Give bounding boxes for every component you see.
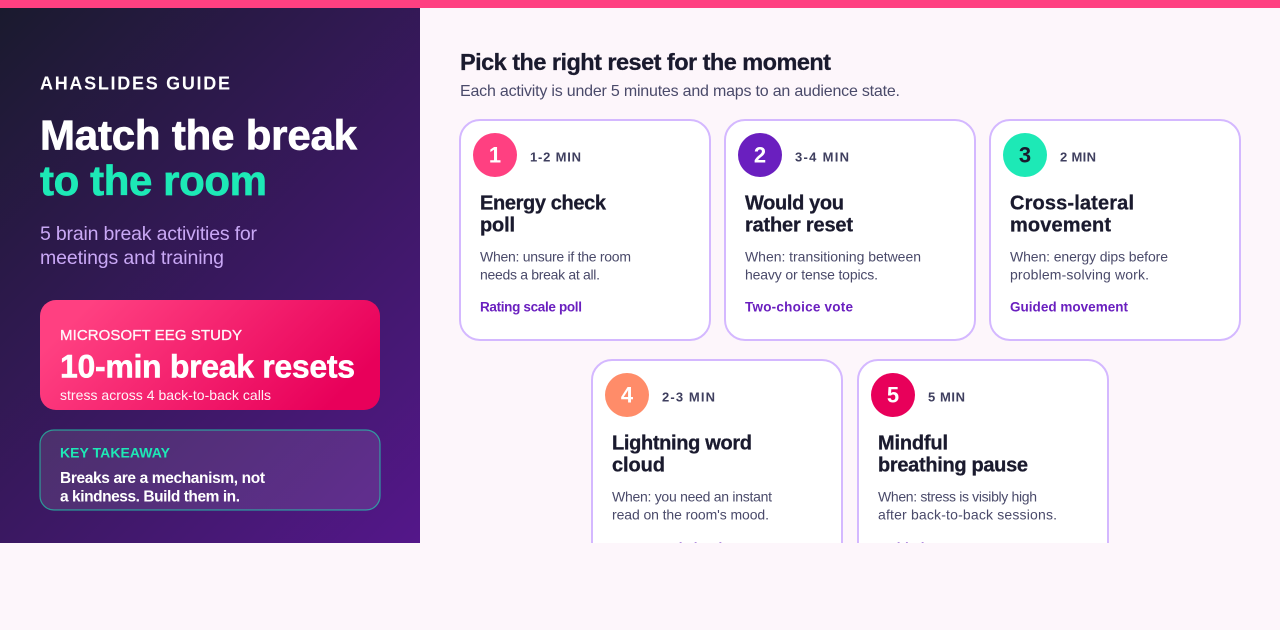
card 2: would you rather reset: 3-4 MIN <box>795 150 849 165</box>
callout: Microsoft EEG study: 10-min break resets <box>60 348 355 384</box>
card 4: lightning word cloud: Lightning word <box>612 432 752 454</box>
callout: Microsoft EEG study <box>40 300 380 410</box>
card 3: cross-lateral movement: Guided movement <box>1010 300 1128 315</box>
card 1: energy check poll: When: unsure if the room <box>480 249 631 265</box>
card 3: cross-lateral movement: problem-solving work. <box>1010 266 1149 282</box>
card 3: cross-lateral movement <box>990 120 1240 340</box>
main title: to the room <box>40 157 267 204</box>
card 4: lightning word cloud: read on the room's mood. <box>612 506 769 522</box>
subtitle: 5 brain break activities for <box>40 223 258 245</box>
card 2: would you rather reset: rather reset <box>745 215 853 237</box>
callout: key takeaway <box>40 430 380 510</box>
main title <box>40 112 358 204</box>
card 2: would you rather reset: Would you <box>745 192 844 214</box>
main title: Match the break <box>40 112 358 158</box>
card 5: mindful breathing pause: Mindful <box>878 432 948 454</box>
card 5: mindful breathing pause: after back-to-back sessions. <box>878 506 1057 522</box>
card 3: cross-lateral movement: 3 <box>1019 142 1031 168</box>
card 5: mindful breathing pause: 5 <box>887 382 899 408</box>
subtitle: meetings and training <box>40 247 224 269</box>
panel: left sidebar <box>0 8 420 543</box>
card 2: would you rather reset: 2 <box>754 142 766 168</box>
callout: key takeaway: Breaks are a mechanism, not <box>60 470 265 487</box>
card 2: would you rather reset <box>725 120 975 340</box>
card 1: energy check poll: poll <box>480 215 515 237</box>
card 5: mindful breathing pause: 5 MIN <box>928 390 965 405</box>
card 1: energy check poll: 1-2 MIN <box>530 150 581 165</box>
card 5: mindful breathing pause: breathing pause <box>878 455 1028 477</box>
card 4: lightning word cloud: When: you need an instant <box>612 489 772 505</box>
section subheading: Each activity is under 5 minutes and maps to an audience state. <box>460 83 900 100</box>
top accent bar <box>0 0 1280 8</box>
subtitle <box>40 223 258 269</box>
card 4: lightning word cloud: cloud <box>612 455 665 477</box>
card 4: lightning word cloud: 4 <box>621 382 634 408</box>
eyebrow label: AHASLIDES GUIDE <box>40 74 230 94</box>
callout: key takeaway: KEY TAKEAWAY <box>60 445 171 461</box>
card 4: lightning word cloud <box>591 359 843 543</box>
callout: Microsoft EEG study: MICROSOFT EEG STUDY <box>60 327 242 344</box>
card 3: cross-lateral movement: 2 MIN <box>1060 150 1096 165</box>
section heading: Pick the right reset for the moment <box>460 49 831 75</box>
card 1: energy check poll: Rating scale poll <box>480 300 582 315</box>
card 3: cross-lateral movement: movement <box>1010 215 1111 237</box>
card 5: mindful breathing pause <box>857 359 1109 543</box>
card 2: would you rather reset: heavy or tense topics. <box>745 266 878 282</box>
card 5: mindful breathing pause: When: stress is visibly high <box>878 489 1037 505</box>
card 4: lightning word cloud: Open word cloud <box>612 540 722 556</box>
card 2: would you rather reset: Two-choice vote <box>745 300 853 315</box>
card 1: energy check poll <box>460 120 710 340</box>
callout: key takeaway: a kindness. Build them in. <box>60 489 240 506</box>
card 1: energy check poll: Energy check <box>480 192 607 214</box>
card 3: cross-lateral movement: Cross-lateral <box>1010 192 1134 214</box>
card 1: energy check poll: needs a break at all. <box>480 266 600 282</box>
callout: Microsoft EEG study: stress across 4 back-to-back calls <box>60 387 271 403</box>
card 2: would you rather reset: When: transitioning between <box>745 249 921 265</box>
card 5: mindful breathing pause: Guided 4-7-8 <box>878 540 960 556</box>
card 1: energy check poll: 1 <box>489 142 501 168</box>
card 3: cross-lateral movement: When: energy dips before <box>1010 249 1168 265</box>
card 4: lightning word cloud: 2-3 MIN <box>662 390 715 405</box>
